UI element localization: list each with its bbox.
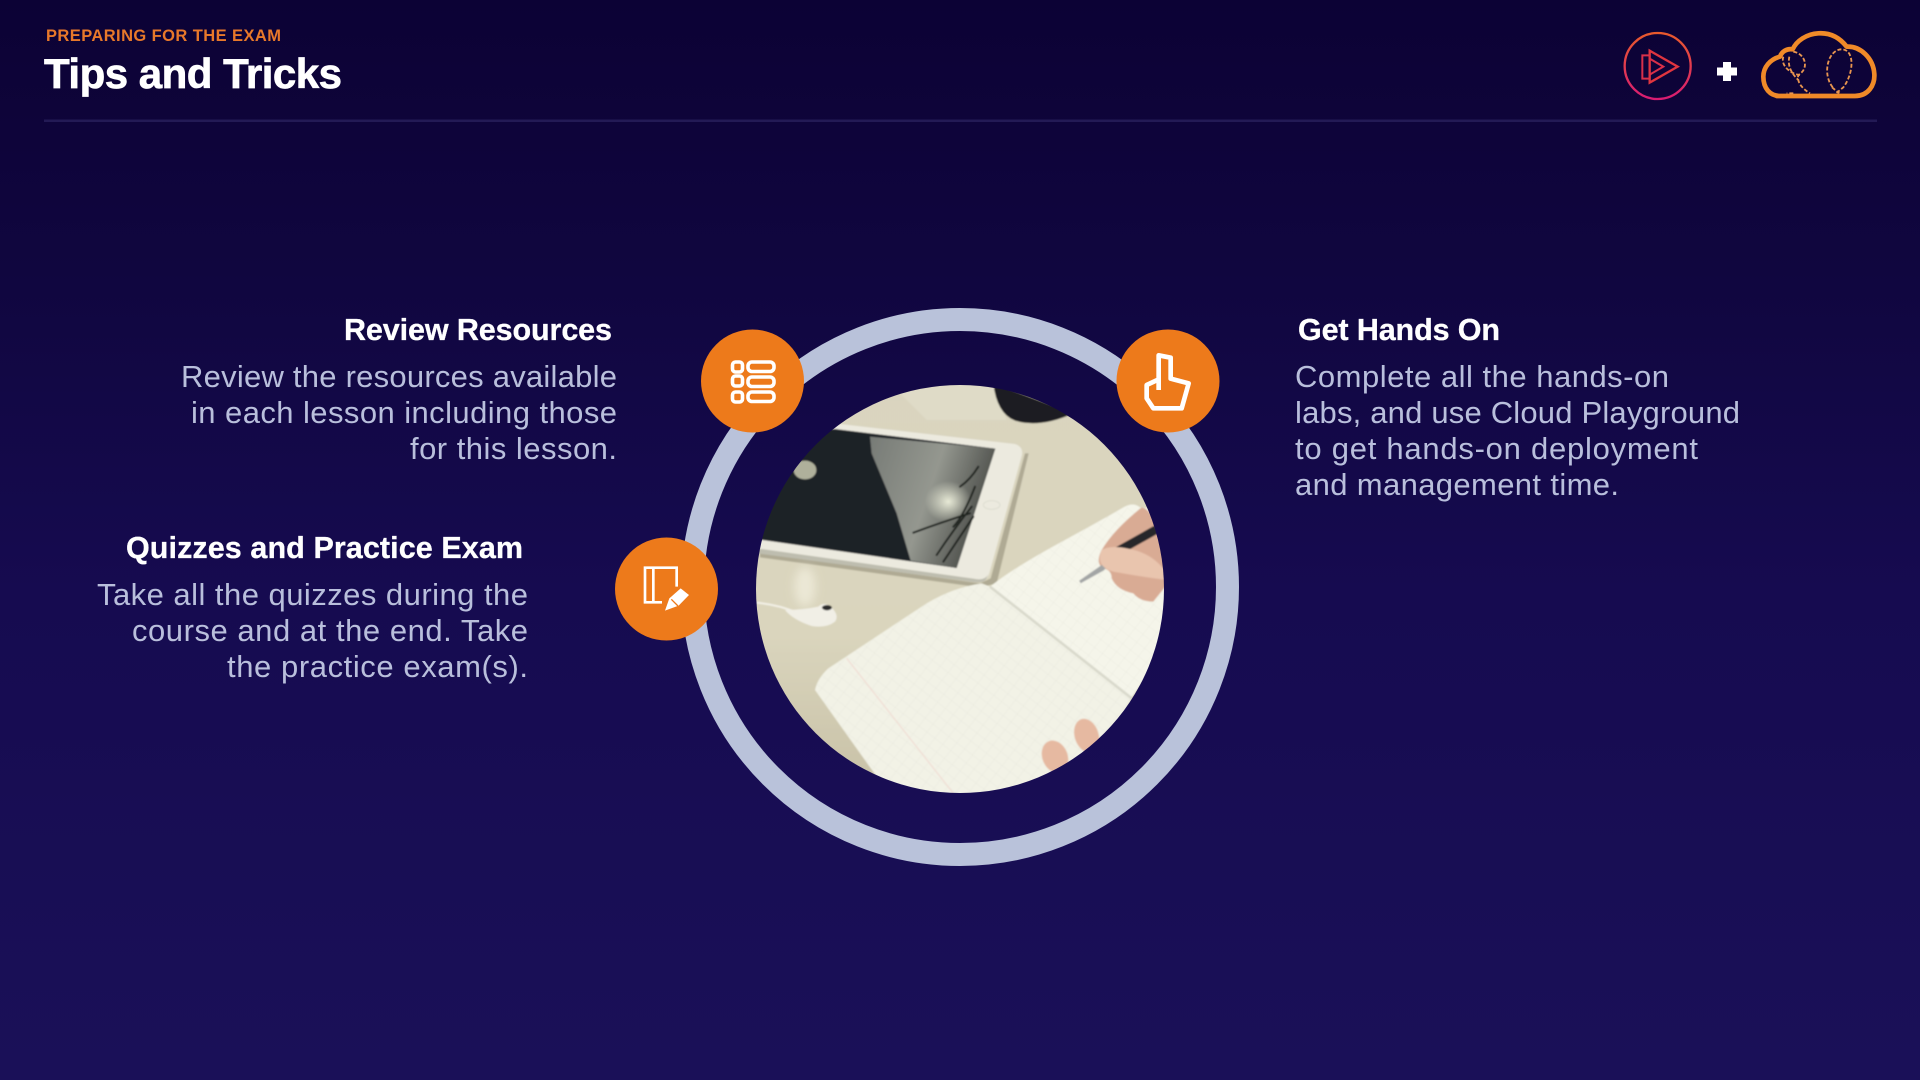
- description: Complete all the hands-on: [1295, 359, 1669, 394]
- description: [181, 359, 617, 466]
- heading: Review Resources: [344, 313, 612, 347]
- heading: Quizzes and Practice Exam: [126, 531, 523, 565]
- logo: cloud with balloons: [1763, 33, 1874, 96]
- description: [97, 577, 528, 684]
- description: for this lesson.: [410, 431, 617, 466]
- left text block: Quizzes and Practice Exam: [97, 531, 528, 684]
- header: eyebrow and title: [44, 27, 342, 97]
- description: to get hands-on deployment: [1295, 431, 1698, 466]
- description: and management time.: [1295, 467, 1619, 502]
- description: the practice exam(s).: [227, 649, 528, 684]
- eyebrow label: PREPARING FOR THE EXAM: [46, 27, 281, 45]
- outer ring: [692, 320, 1228, 854]
- description: in each lesson including those: [191, 395, 617, 430]
- icon: document with pencil on orange circle: [615, 538, 718, 640]
- description: Take all the quizzes during the: [97, 577, 528, 612]
- plus sign: [1717, 62, 1737, 81]
- description: labs, and use Cloud Playground: [1295, 395, 1740, 430]
- left text block: Review Resources: [181, 313, 617, 466]
- central photo: desk with tablet and notebook: [756, 385, 1164, 793]
- title: Tips and Tricks: [44, 50, 342, 97]
- description: course and at the end. Take: [132, 613, 528, 648]
- logo: play-style circle: [1625, 33, 1691, 99]
- right text block: Get Hands On: [1295, 313, 1740, 502]
- description: [1295, 359, 1740, 502]
- description: Review the resources available: [181, 359, 617, 394]
- heading: Get Hands On: [1298, 313, 1500, 347]
- icon: list on orange circle: [701, 330, 804, 432]
- icon: pointing hand on orange circle: [1116, 330, 1220, 432]
